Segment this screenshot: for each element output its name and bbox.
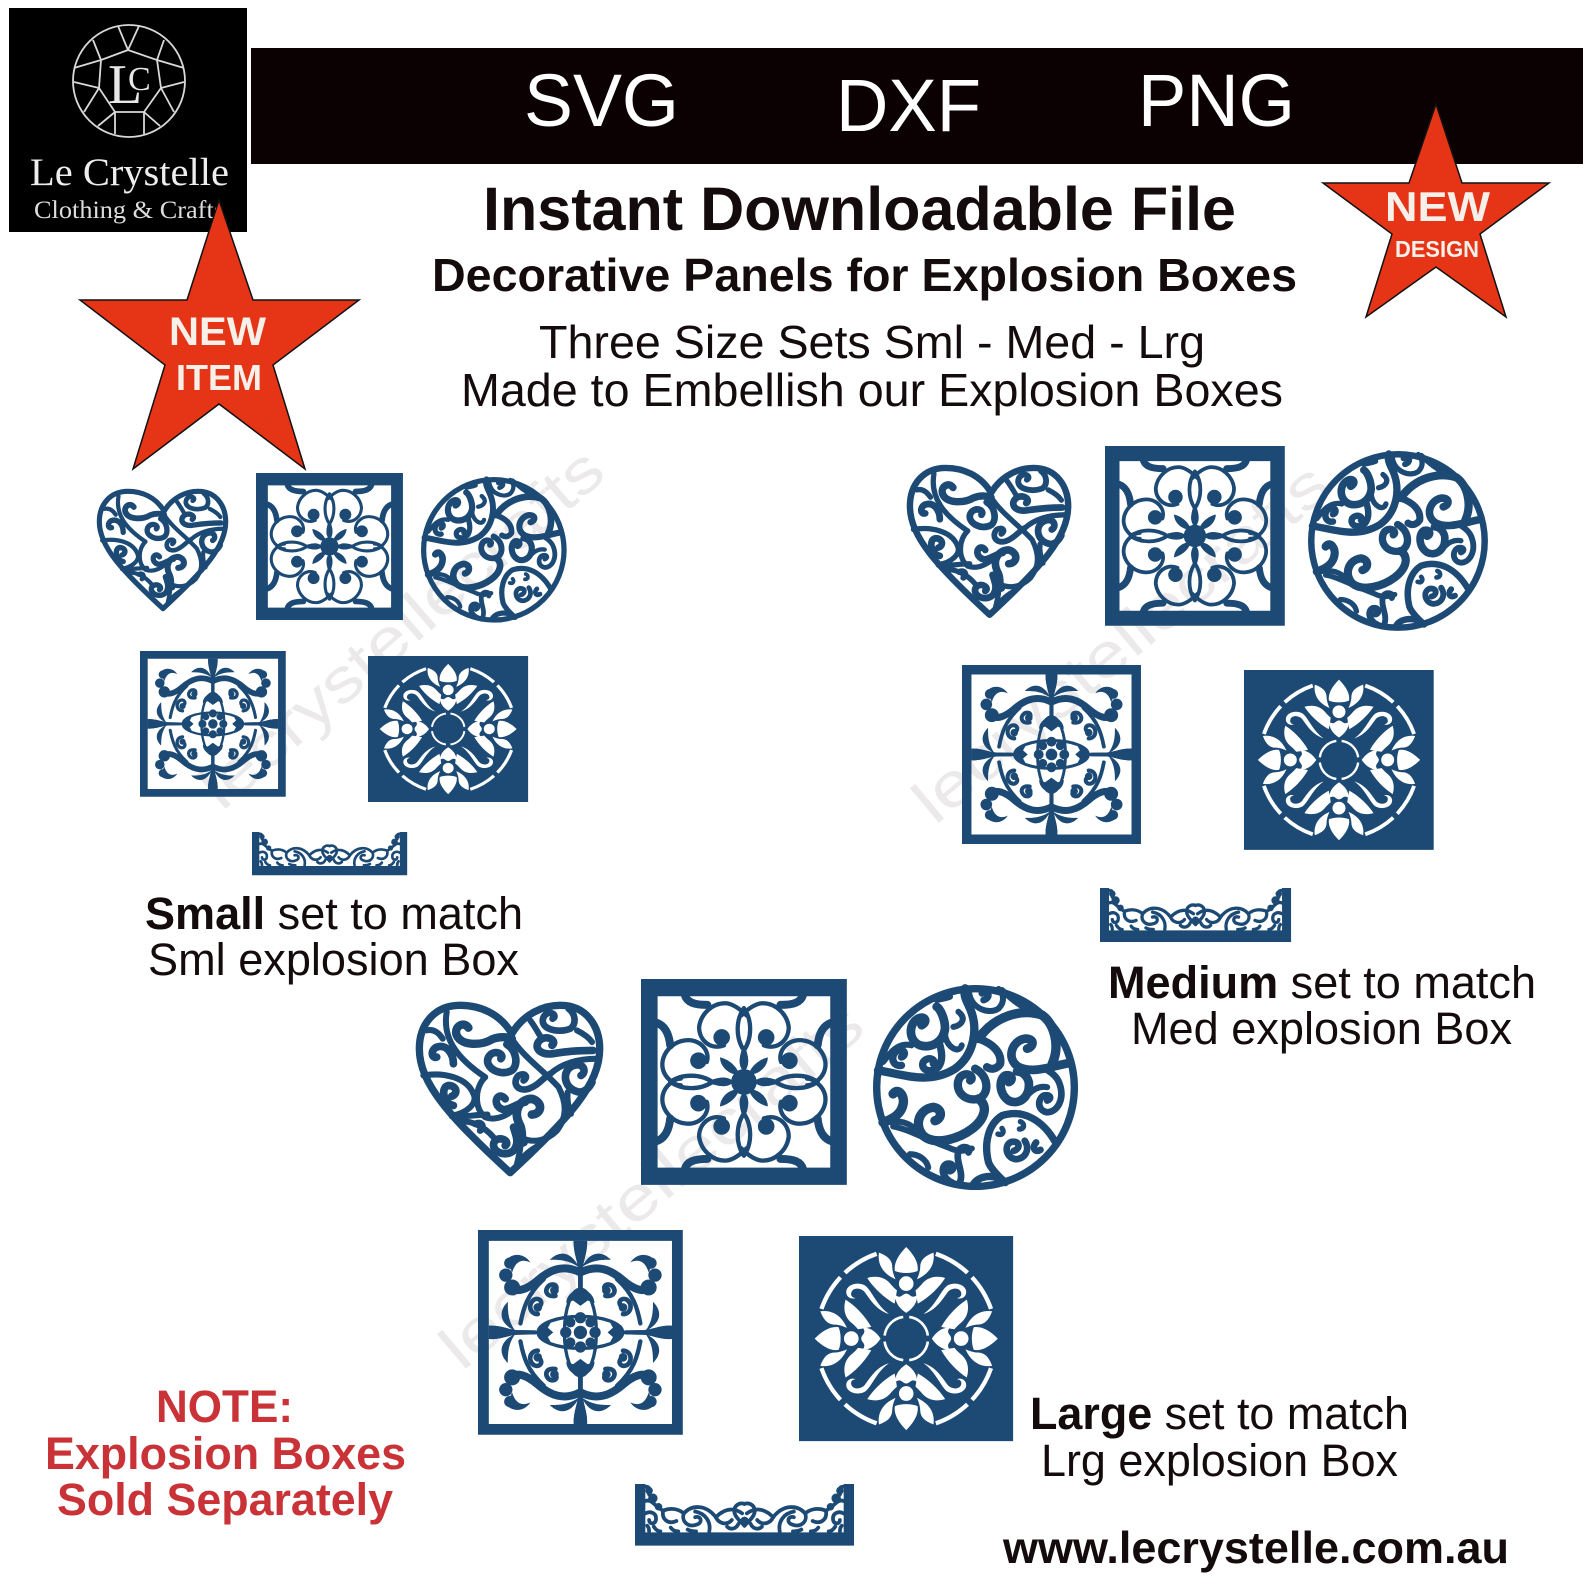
logo panel <box>9 8 247 232</box>
website: www.lecrystelle.com.au <box>1002 1523 1509 1573</box>
medium set caption: Medium set to match <box>1108 957 1536 1008</box>
logo panel: C <box>128 61 151 98</box>
large border <box>635 1484 854 1546</box>
small set caption <box>145 888 523 985</box>
format label SVG: SVG <box>524 59 679 142</box>
watermark medium: lecrystellecrafts <box>900 450 1342 837</box>
medium rosette <box>1244 670 1434 850</box>
small set <box>99 473 564 875</box>
small set caption: Sml explosion Box <box>148 934 519 985</box>
star text DESIGN: DESIGN <box>1395 236 1479 262</box>
large set <box>419 979 1074 1546</box>
medium swirl circle <box>1311 454 1485 628</box>
watermarks <box>186 435 1342 1383</box>
large set caption <box>1030 1388 1409 1486</box>
subtitle: Decorative Panels for Explosion Boxes <box>432 249 1297 301</box>
logo tagline: Clothing & Crafts <box>34 197 224 224</box>
format label PNG: PNG <box>1138 59 1295 142</box>
small scroll square <box>256 473 403 620</box>
medium set caption <box>1108 957 1536 1054</box>
medium scroll square <box>1105 446 1285 626</box>
note: NOTE: <box>156 1381 293 1432</box>
description line 1: Three Size Sets Sml - Med - Lrg <box>539 316 1205 368</box>
logo monogram: L <box>108 54 142 116</box>
watermark small: lecrystellecrafts <box>186 435 618 823</box>
small heart <box>99 491 226 609</box>
star: new item <box>80 200 359 469</box>
medium border <box>1100 888 1291 942</box>
note: Sold Separately <box>57 1474 393 1525</box>
small rosette <box>368 656 528 802</box>
star text NEW: NEW <box>1385 183 1490 230</box>
star text NEW: NEW <box>169 310 266 354</box>
small border <box>252 832 407 875</box>
title: Instant Downloadable File <box>483 175 1236 243</box>
note <box>45 1381 406 1525</box>
logo emblem <box>73 25 185 137</box>
medium filigree square <box>962 665 1141 844</box>
watermark large: lecrystellecrafts <box>427 989 877 1383</box>
note: Explosion Boxes <box>45 1428 406 1479</box>
star text ITEM: ITEM <box>176 357 262 398</box>
header bar <box>251 48 1583 164</box>
large filigree square <box>478 1230 683 1435</box>
star: new design <box>1323 104 1549 317</box>
large swirl circle <box>877 988 1074 1186</box>
small filigree square <box>140 651 286 797</box>
medium set <box>910 446 1485 942</box>
format label DXF: DXF <box>836 64 981 147</box>
large set caption: Lrg explosion Box <box>1041 1435 1398 1486</box>
large heart <box>419 1005 600 1173</box>
medium heart <box>910 468 1068 615</box>
description line 2: Made to Embellish our Explosion Boxes <box>461 364 1283 416</box>
large scroll square <box>641 979 847 1185</box>
small set caption: Small set to match <box>145 888 523 939</box>
medium set caption: Med explosion Box <box>1131 1003 1512 1054</box>
logo name: Le Crystelle <box>30 151 229 194</box>
large set caption: Large set to match <box>1030 1388 1409 1439</box>
small swirl circle <box>424 479 564 620</box>
large rosette <box>799 1236 1013 1441</box>
